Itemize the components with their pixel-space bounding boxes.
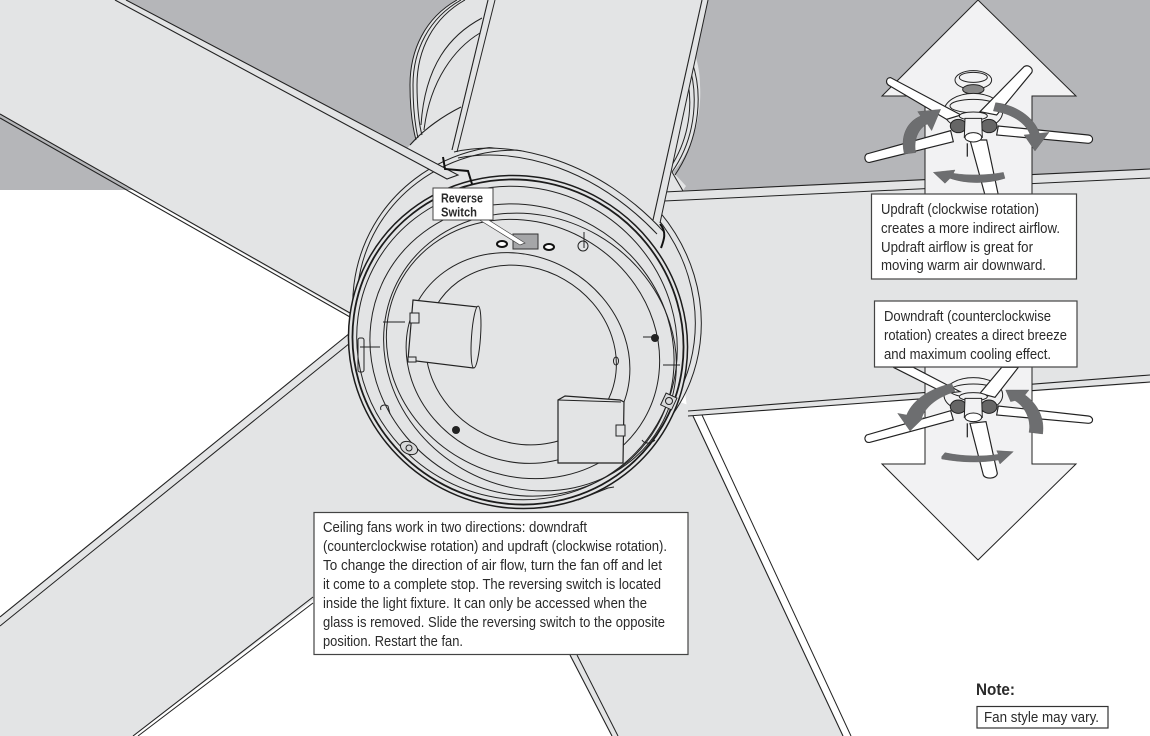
reverse switch callout <box>433 188 525 245</box>
light fixture rings <box>287 82 763 570</box>
downdraft fan icon <box>865 367 1093 478</box>
main instructions text box: To change the direction of air flow, turn the fan off and let <box>323 558 662 574</box>
fan blade: right <box>660 169 1150 416</box>
mounting tabs <box>358 338 677 500</box>
main instructions text box: inside the light fixture. It can only be accessed when the <box>323 596 647 612</box>
wire near switch <box>443 157 472 184</box>
downdraft arrow <box>882 366 1076 560</box>
mounting screws <box>452 232 659 434</box>
main instructions text box: it come to a complete stop. The reversing switch is located <box>323 577 661 593</box>
updraft text box: Updraft airflow is great for <box>881 240 1033 256</box>
updraft fan icon <box>865 66 1093 195</box>
reverse switch <box>513 234 538 249</box>
fan blade: upper left <box>0 0 458 317</box>
fan blade: top <box>452 0 708 234</box>
downdraft text box <box>874 301 1077 367</box>
reverse switch callout: Reverse <box>441 192 483 206</box>
main instructions text box: (counterclockwise rotation) and updraft (clockwise rotation). <box>323 539 667 555</box>
wire clip on right <box>660 224 664 248</box>
updraft text box: moving warm air downward. <box>881 258 1046 274</box>
main instructions text box: glass is removed. Slide the reversing switch to the opposite <box>323 615 665 631</box>
grey ceiling <box>0 0 1150 192</box>
downdraft text box: and maximum cooling effect. <box>884 347 1051 363</box>
main instructions text box: position. Restart the fan. <box>323 634 463 650</box>
blade tip over ring <box>115 0 458 179</box>
updraft text box <box>872 194 1076 279</box>
right junction box <box>558 396 625 463</box>
note heading: Note: <box>976 680 1015 699</box>
note box: Fan style may vary. <box>984 710 1099 726</box>
motor housing behind the top blade <box>405 0 700 195</box>
updraft text box: creates a more indirect airflow. <box>881 221 1060 237</box>
downdraft text box: rotation) creates a direct breeze <box>884 328 1067 344</box>
left junction box <box>408 300 483 368</box>
main instructions text box <box>314 512 688 654</box>
fan blade: lower left <box>0 333 518 736</box>
updraft text box: Updraft (clockwise rotation) <box>881 202 1039 218</box>
downdraft text box: Downdraft (counterclockwise <box>884 309 1051 325</box>
updraft arrow <box>882 0 1076 195</box>
fan blade: bottom <box>313 342 851 736</box>
main instructions text box: Ceiling fans work in two directions: downdraft <box>323 520 587 536</box>
reverse switch callout: Switch <box>441 206 477 220</box>
